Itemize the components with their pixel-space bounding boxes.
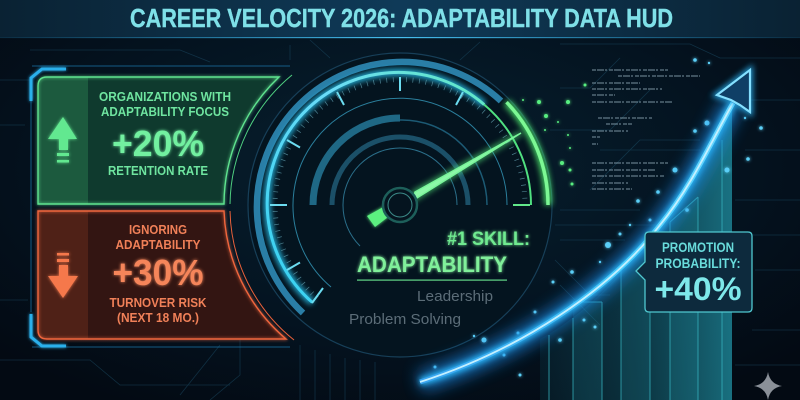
skill ranking text: ADAPTABILITY bbox=[357, 252, 507, 277]
particles blue bbox=[434, 58, 763, 376]
bar chart under the growth curve bbox=[540, 105, 732, 400]
gauge bbox=[248, 53, 552, 357]
callout: promotion probability: PROBABILITY: bbox=[656, 256, 740, 271]
retention text: RETENTION RATE bbox=[108, 164, 208, 178]
gauge needle bbox=[367, 133, 521, 227]
turnover text bbox=[110, 223, 206, 325]
title band bbox=[0, 0, 800, 38]
skill ranking text bbox=[349, 229, 530, 328]
skill ranking text: #1 SKILL: bbox=[447, 229, 530, 250]
panel: retention bbox=[38, 75, 292, 204]
data readout lines bbox=[592, 70, 700, 189]
callout: promotion probability bbox=[636, 232, 752, 312]
gauge hub bbox=[383, 188, 417, 222]
retention text bbox=[99, 90, 231, 178]
particles green bbox=[522, 84, 586, 186]
title: CAREER VELOCITY 2026: ADAPTABILITY DATA HUD bbox=[130, 3, 673, 33]
gauge ticks bbox=[270, 77, 530, 303]
retention text: ORGANIZATIONS WITH bbox=[99, 90, 231, 104]
callout: promotion probability: PROMOTION bbox=[662, 240, 734, 255]
turnover text: TURNOVER RISK bbox=[110, 296, 206, 310]
gauge inner arcs bbox=[293, 98, 507, 287]
growth arrow bbox=[420, 70, 750, 382]
icon: down arrow bbox=[48, 253, 78, 298]
retention text: +20% bbox=[112, 123, 204, 164]
turnover text: IGNORING bbox=[129, 223, 187, 237]
skill ranking text: Problem Solving bbox=[349, 312, 461, 328]
icon: sparkle watermark bbox=[754, 372, 782, 400]
icon: up arrow bbox=[48, 117, 77, 162]
turnover text: +30% bbox=[112, 252, 204, 293]
callout: promotion probability: +40% bbox=[654, 271, 742, 307]
HUD bracket around left panels bbox=[31, 66, 290, 347]
retention text: ADAPTABILITY FOCUS bbox=[101, 105, 229, 119]
skill ranking text: Leadership bbox=[417, 289, 493, 305]
turnover text: ADAPTABILITY bbox=[116, 238, 201, 252]
panel: turnover bbox=[38, 211, 294, 340]
title divider bbox=[0, 37, 800, 38]
turnover text: (NEXT 18 MO.) bbox=[117, 311, 199, 325]
